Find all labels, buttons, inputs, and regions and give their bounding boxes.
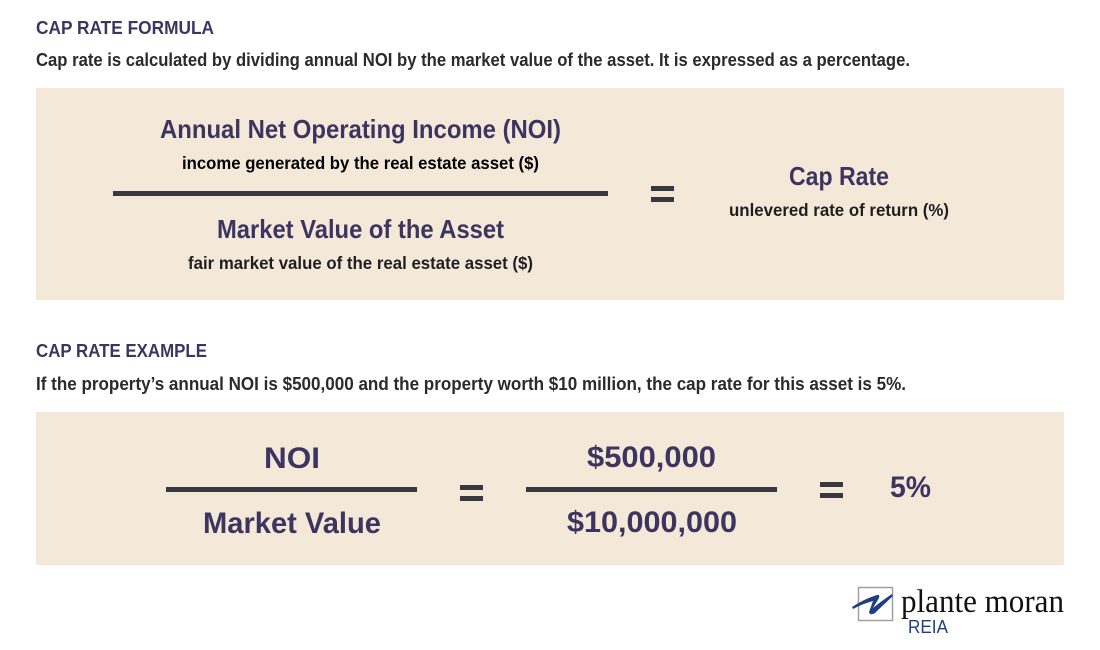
numerator: NOI: NOI bbox=[264, 442, 320, 475]
heading: cap rate example: CAP RATE EXAMPLE bbox=[36, 341, 207, 361]
result note: unlevered rate of return (%) bbox=[729, 200, 949, 220]
denominator: market value: Market Value bbox=[203, 507, 381, 540]
denominator: $10,000,000: $10,000,000 bbox=[567, 506, 737, 539]
panel: example bbox=[36, 412, 1064, 565]
numerator title: Annual Net Operating Income (NOI) bbox=[160, 114, 561, 144]
equals sign bbox=[460, 485, 483, 501]
fraction bar bbox=[113, 191, 608, 196]
REIA label: REIA bbox=[908, 617, 948, 637]
heading: cap rate formula: CAP RATE FORMULA bbox=[36, 18, 214, 38]
equals sign bbox=[820, 482, 843, 498]
result title: Cap Rate bbox=[789, 161, 889, 191]
panel: formula bbox=[36, 88, 1064, 300]
fraction bar bbox=[526, 487, 777, 492]
result: 5%: 5% bbox=[890, 471, 931, 504]
fraction bar bbox=[166, 487, 417, 492]
icon: logo mark bbox=[852, 588, 893, 620]
denominator note: fair market value of the real estate asset ($) bbox=[188, 253, 533, 273]
numerator note: income generated by the real estate asset ($) bbox=[182, 153, 539, 173]
denominator title: Market Value of the Asset bbox=[217, 214, 504, 244]
text: formula description: Cap rate is calculated by dividing annual NOI by the market value of the asset. It is expressed as a percentage. bbox=[36, 49, 910, 70]
equals sign bbox=[651, 186, 674, 202]
logo: plante moran REIA bbox=[852, 584, 1064, 637]
numerator: $500,000: $500,000 bbox=[587, 441, 716, 474]
text: example description: If the property’s annual NOI is $500,000 and the property worth $10 million, the cap rate for this asset is 5%. bbox=[36, 373, 906, 394]
wordmark: plante moran bbox=[901, 584, 1064, 620]
